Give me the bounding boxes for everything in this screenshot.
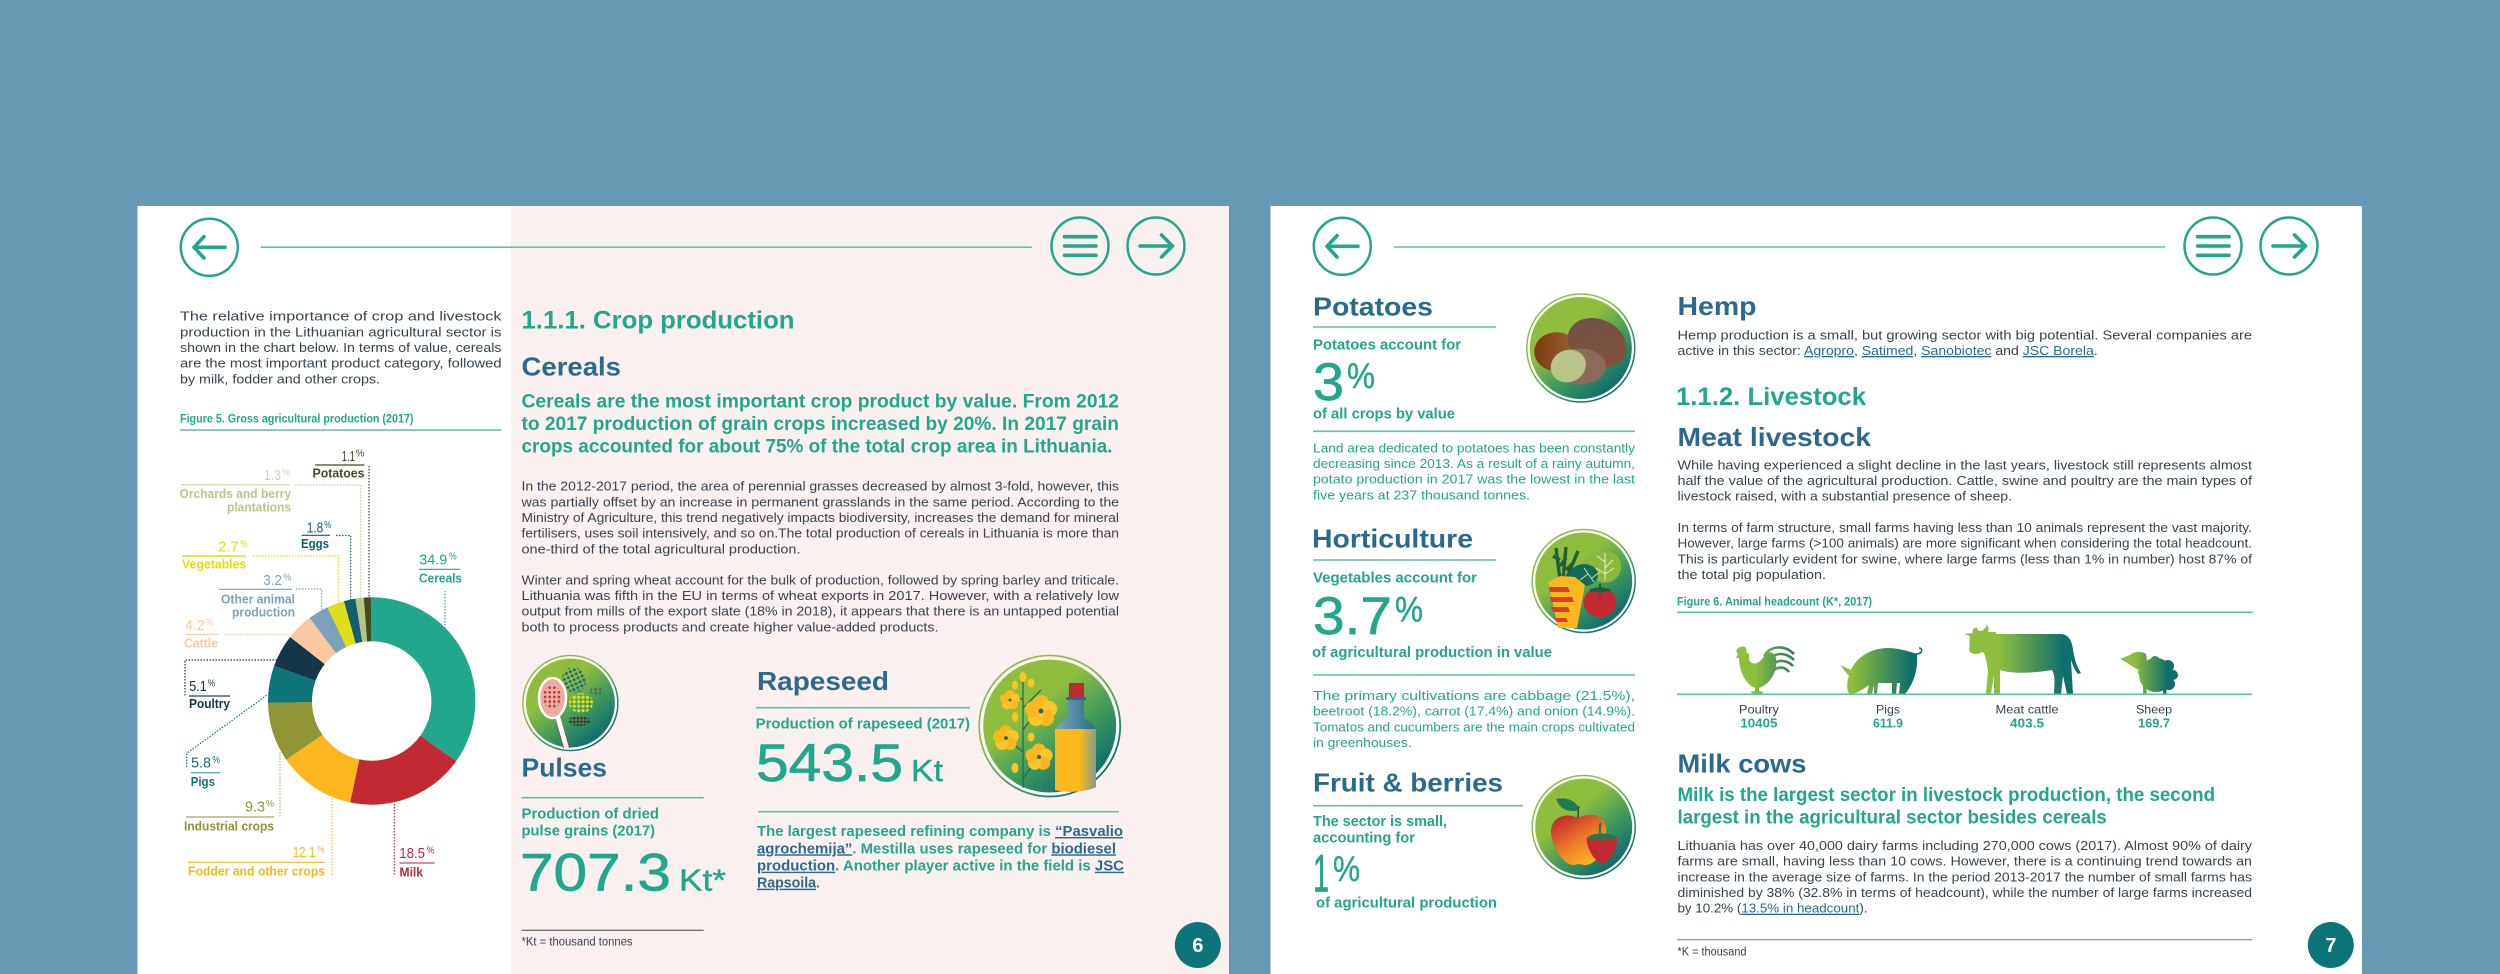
- label: poultry 5.1%: 5.1: [189, 678, 207, 695]
- body text: cereals paragraph 1: one-third of the total agricultural production.: [522, 541, 800, 556]
- label: industrial crops 9.3%: %: [266, 799, 274, 810]
- stat: dried pulse grains: Kt*: [679, 863, 726, 898]
- section: potatoes: decreasing since 2013. As a result of a rainy autumn,: [1313, 456, 1635, 471]
- section: meat livestock: the total pig population.: [1678, 567, 1826, 582]
- label: orchards 1.3%: Orchards and berry: [180, 487, 291, 501]
- stat: dried pulse grains: pulse grains (2017): [522, 824, 655, 840]
- section: milk cows: Lithuania has over 40,000 dairy farms including 270,000 cows (2017). Almost 90% of dairy: [1678, 838, 2252, 853]
- section: meat livestock: While having experienced a slight decline in the last years, livestock still represents almost: [1678, 457, 2252, 472]
- icon: back arrow: [181, 219, 238, 276]
- label: vegetables 2.7%: Vegetables: [182, 558, 246, 572]
- section: horticulture: Tomatos and cucumbers are the main crops cultivated: [1313, 719, 1635, 734]
- label: other animal production 3.2%: production: [232, 606, 295, 620]
- label: orchards 1.3%: 1.3: [264, 467, 281, 484]
- label: cattle 4.2%: Cattle: [184, 637, 218, 651]
- label: potatoes 1.1%: 1.1: [342, 448, 355, 465]
- icon: menu: [1052, 218, 1108, 274]
- section: hemp: [1678, 291, 2252, 358]
- section: potatoes: potato production in 2017 was the lowest in the last: [1313, 472, 1635, 487]
- section: potatoes: [1313, 292, 1635, 502]
- section: horticulture: [1312, 524, 1635, 750]
- label: vegetables 2.7%: [182, 539, 338, 602]
- section: horticulture: The primary cultivations are cabbage (21.5%),: [1313, 688, 1635, 703]
- label: pigs 5.8%: 5.8: [191, 755, 211, 772]
- label: vegetables 2.7%: 2.7: [218, 539, 239, 556]
- header rule: [1394, 246, 2165, 248]
- section: meat livestock: [1678, 422, 2252, 582]
- section: milk cows: diminished by 38% (32.8% in terms of headcount), while the number of large farms increased: [1678, 885, 2252, 900]
- label: vegetables 2.7%: %: [240, 539, 248, 550]
- donut chart: gross agricultural production: [290, 619, 453, 783]
- label: pigs 5.8%: [187, 695, 267, 789]
- panel: left page 6: [138, 206, 1229, 974]
- label: cattle 4.2%: [184, 617, 293, 651]
- label: eggs 1.8%: %: [324, 520, 331, 531]
- page number 7: 7: [2325, 935, 2336, 957]
- panel: pink content column: [511, 206, 1229, 974]
- section: milk cows: Milk is the largest sector in livestock production, the second: [1678, 785, 2215, 806]
- label: sheep: 169.7: [2138, 716, 2170, 730]
- label: poultry: Poultry: [1739, 702, 1779, 716]
- label: poultry 5.1%: %: [208, 678, 215, 690]
- label: other animal production 3.2%: %: [283, 572, 291, 584]
- icon: rapeseed and oil bottle: [979, 656, 1120, 796]
- section: horticulture: in greenhouses.: [1313, 735, 1412, 750]
- page number 6: 6: [1192, 935, 1203, 957]
- heading: livestock: 1.1.2. Livestock: [1676, 383, 1866, 411]
- label: fodder 12.1%: 12.1: [293, 844, 315, 861]
- section: fruit and berries: The sector is small,: [1313, 814, 1447, 830]
- label: poultry 5.1%: [185, 660, 277, 711]
- icon: next arrow: [2260, 218, 2318, 274]
- stat: rapeseed production: Kt: [911, 753, 943, 788]
- intro text: production in the Lithuanian agricultural sector is: [180, 324, 502, 339]
- label: pigs: [1873, 702, 1903, 730]
- figure 5 heading: Figure 5. Gross agricultural production (2017): [180, 414, 414, 426]
- section: horticulture: Vegetables account for: [1313, 571, 1477, 587]
- section: horticulture: 3.7: [1313, 587, 1392, 646]
- section: potatoes: of all crops by value: [1313, 406, 1455, 422]
- section: potatoes: 3: [1313, 353, 1344, 412]
- section: fruit and berries: [1313, 768, 1523, 911]
- section: hemp: Hemp: [1678, 291, 1756, 321]
- label: industrial crops 9.3%: 9.3: [245, 799, 265, 816]
- icon: apple and strawberry: [1532, 776, 1635, 878]
- rapeseed companies text: production. Another player active in the field is JSC: [757, 859, 1125, 875]
- section: potatoes: five years at 237 thousand tonnes.: [1313, 487, 1530, 502]
- label: poultry: [1739, 702, 1779, 730]
- footnote: K: *K = thousand: [1678, 946, 1746, 958]
- section: meat livestock: However, large farms (>100 animals) are more significant when considering the total headcount.: [1678, 536, 2252, 551]
- section: horticulture: %: [1395, 591, 1423, 630]
- stat: dried pulse grains: Production of dried: [522, 806, 659, 822]
- label: other animal production 3.2%: Other animal: [221, 592, 295, 606]
- section: milk cows: [1678, 748, 2252, 916]
- intro text: [180, 309, 502, 386]
- body text: cereals paragraph 1: [520, 479, 1119, 556]
- icon: sheep: [2120, 652, 2178, 694]
- lead text: cereals: to 2017 production of grain crops increased by 20%. In 2017 grain: [522, 414, 1119, 435]
- page number 7: [2308, 922, 2354, 968]
- panel: right page 7: [1270, 206, 2362, 974]
- label: milk 18.5%: [394, 804, 435, 880]
- label: cattle 4.2%: 4.2: [185, 617, 205, 634]
- icon: pig: [1840, 648, 1922, 694]
- section: potatoes: Potatoes account for: [1313, 338, 1461, 354]
- icon: vegetables: [1532, 530, 1635, 632]
- label: fodder 12.1%: %: [317, 844, 324, 856]
- stat: dried pulse grains: [520, 798, 726, 903]
- label: meat cattle: [1996, 702, 2059, 730]
- section: potatoes: %: [1347, 357, 1375, 396]
- section: fruit and berries: accounting for: [1313, 831, 1415, 847]
- footnote: Kt: *Kt = thousand tonnes: [522, 937, 633, 949]
- section: potatoes: Potatoes: [1313, 292, 1433, 322]
- stat: rapeseed production: [756, 708, 970, 793]
- label: potatoes 1.1%: Potatoes: [312, 467, 365, 481]
- label: pigs: 611.9: [1873, 716, 1903, 730]
- label: milk 18.5%: %: [427, 846, 434, 856]
- label: fodder 12.1%: [188, 798, 332, 879]
- figure 6 heading: Figure 6. Animal headcount (K*, 2017): [1677, 596, 1872, 608]
- label: orchards 1.3%: plantations: [227, 501, 291, 515]
- intro text: shown in the chart below. In terms of value, cereals: [180, 340, 502, 355]
- section: fruit and berries: of agricultural production: [1316, 895, 1497, 911]
- section: meat livestock: livestock raised, with a substantial presence of sheep.: [1678, 489, 2012, 504]
- section: hemp: active in this sector: Agropro, Satimed, Sanobiotec and JSC Borela .: [1678, 343, 2098, 358]
- section: horticulture: beetroot (18.2%), carrot (17.4%) and onion (14.9%).: [1313, 704, 1635, 719]
- header rule: [261, 246, 1032, 248]
- label: pigs 5.8%: Pigs: [191, 775, 215, 789]
- label: cattle 4.2%: %: [206, 618, 213, 628]
- label: sheep: [2136, 702, 2172, 730]
- section: milk cows: Milk cows: [1678, 748, 1806, 778]
- label: orchards 1.3%: [180, 467, 361, 598]
- section: potatoes: Land area dedicated to potatoes has been constantly: [1313, 440, 1635, 455]
- heading: cereals: Cereals: [522, 352, 621, 382]
- label: eggs 1.8%: [301, 519, 351, 600]
- label: industrial crops 9.3%: [184, 752, 280, 834]
- section: fruit and berries: 1: [1313, 845, 1329, 904]
- rapeseed companies text: Rapsoila.: [757, 876, 820, 892]
- intro text: are the most important product category, followed: [180, 356, 502, 371]
- rapeseed companies text: agrochemija”. Mestilla uses rapeseed for biodiesel: [757, 841, 1116, 857]
- body text: cereals paragraph 2: both to process products and create higher value-added products.: [522, 619, 938, 634]
- icon: rooster: [1736, 646, 1794, 694]
- body text: cereals paragraph 2: Lithuania was fifth in the EU in terms of wheat exports in 2017. However, with a relatively low: [522, 588, 1120, 603]
- section: fruit and berries: %: [1333, 850, 1360, 889]
- label: other animal production 3.2%: 3.2: [263, 572, 282, 589]
- icon: back arrow: [1314, 218, 1371, 275]
- section: meat livestock: half the value of the agricultural production. Cattle, swine and poultry are the main types of: [1678, 473, 2252, 488]
- rapeseed companies text: [757, 812, 1125, 892]
- label: sheep: Sheep: [2136, 702, 2172, 716]
- body text: cereals paragraph 1: Ministry of Agriculture, this trend negatively impacts biodiversity, increases the demand for mineral: [522, 510, 1119, 525]
- lead text: cereals: [522, 392, 1119, 457]
- label: cereals 34.9%: 34.9: [419, 551, 447, 568]
- label: pigs 5.8%: %: [212, 755, 220, 766]
- label: eggs 1.8%: Eggs: [301, 537, 329, 551]
- icon: cow: [1964, 624, 2081, 694]
- section: milk cows: farms are small, having less than 10 cows. However, there is a continuing trend towards an: [1678, 854, 2252, 869]
- rapeseed companies text: The largest rapeseed refining company is “Pasvalio: [757, 824, 1123, 840]
- stat: dried pulse grains: 707.3: [520, 844, 671, 903]
- label: potatoes 1.1%: [312, 448, 369, 598]
- body text: cereals paragraph 1: In the 2012-2017 period, the area of perennial grasses decreased by almost 3-fold, however, this: [522, 479, 1119, 494]
- heading: rapeseed: Rapeseed: [757, 666, 889, 696]
- intro text: by milk, fodder and other crops.: [180, 371, 380, 386]
- section: horticulture: of agricultural production in value: [1312, 645, 1552, 661]
- label: milk 18.5%: Milk: [400, 866, 423, 880]
- body text: cereals paragraph 2: [522, 572, 1120, 634]
- label: fodder 12.1%: Fodder and other crops: [188, 865, 325, 879]
- label: meat cattle: 403.5: [2010, 716, 2044, 730]
- section: meat livestock: Meat livestock: [1678, 422, 1872, 452]
- icon: next arrow: [1128, 218, 1184, 274]
- label: cereals 34.9%: Cereals: [419, 572, 462, 586]
- label: pigs: Pigs: [1876, 702, 1900, 716]
- label: potatoes 1.1%: %: [356, 449, 364, 460]
- section: meat livestock: This is particularly evident for swine, where large farms (less than 1% in number) host 87% of: [1678, 551, 2252, 566]
- icon: pulses: [523, 656, 618, 750]
- label: industrial crops 9.3%: Industrial crops: [184, 820, 274, 834]
- label: other animal production 3.2%: [219, 572, 322, 620]
- heading: pulses: Pulses: [522, 753, 607, 783]
- heading: crop production: 1.1.1. Crop production: [522, 306, 794, 334]
- label: eggs 1.8%: 1.8: [307, 519, 323, 536]
- body text: cereals paragraph 2: Winter and spring wheat account for the bulk of production, followed by spring barley and triticale.: [522, 572, 1119, 587]
- stat: rapeseed production: 543.5: [756, 734, 903, 793]
- body text: cereals paragraph 1: was partially offset by an increase in permanent grasslands in the same period. According to the: [520, 494, 1119, 509]
- section: hemp: Hemp production is a small, but growing sector with big potential. Several companies are: [1678, 327, 2252, 342]
- label: orchards 1.3%: %: [282, 468, 290, 478]
- section: meat livestock: In terms of farm structure, small farms having less than 10 animals represent the vast majority.: [1678, 520, 2252, 535]
- section: fruit and berries: Fruit & berries: [1313, 768, 1503, 798]
- stat: rapeseed production: Production of rapeseed (2017): [756, 716, 970, 732]
- chart: animal headcount pictograms: [1677, 624, 2252, 730]
- label: poultry: 10405: [1740, 716, 1777, 730]
- section: milk cows: by 10.2% (13.5% in headcount).: [1678, 901, 1868, 916]
- body text: cereals paragraph 1: fertilisers, uses soil intensively, and so on.The total production of cereals in Lithuania is more than: [522, 526, 1119, 541]
- page number 6: [1175, 922, 1221, 968]
- body text: cereals paragraph 2: output from mills of the export slate (18% in 2018), it appears that there is an untapped potential: [522, 604, 1119, 619]
- section: milk cows: increase in the average size of farms. In the period 2013-2017 the number of small farms has: [1678, 869, 2252, 884]
- label: cereals 34.9%: %: [449, 552, 457, 563]
- intro text: The relative importance of crop and livestock: [180, 309, 502, 324]
- lead text: cereals: crops accounted for about 75% of the total crop area in Lithuania.: [522, 436, 1112, 457]
- label: cereals 34.9%: [419, 551, 462, 630]
- section: milk cows: largest in the agricultural sector besides cereals: [1678, 807, 2107, 828]
- icon: menu: [2184, 218, 2242, 274]
- label: poultry 5.1%: Poultry: [189, 697, 230, 711]
- label: milk 18.5%: 18.5: [399, 845, 425, 862]
- label: meat cattle: Meat cattle: [1996, 702, 2059, 716]
- lead text: cereals: Cereals are the most important crop product by value. From 2012: [522, 392, 1119, 413]
- icon: potatoes: [1527, 294, 1635, 402]
- section: horticulture: Horticulture: [1312, 524, 1473, 554]
